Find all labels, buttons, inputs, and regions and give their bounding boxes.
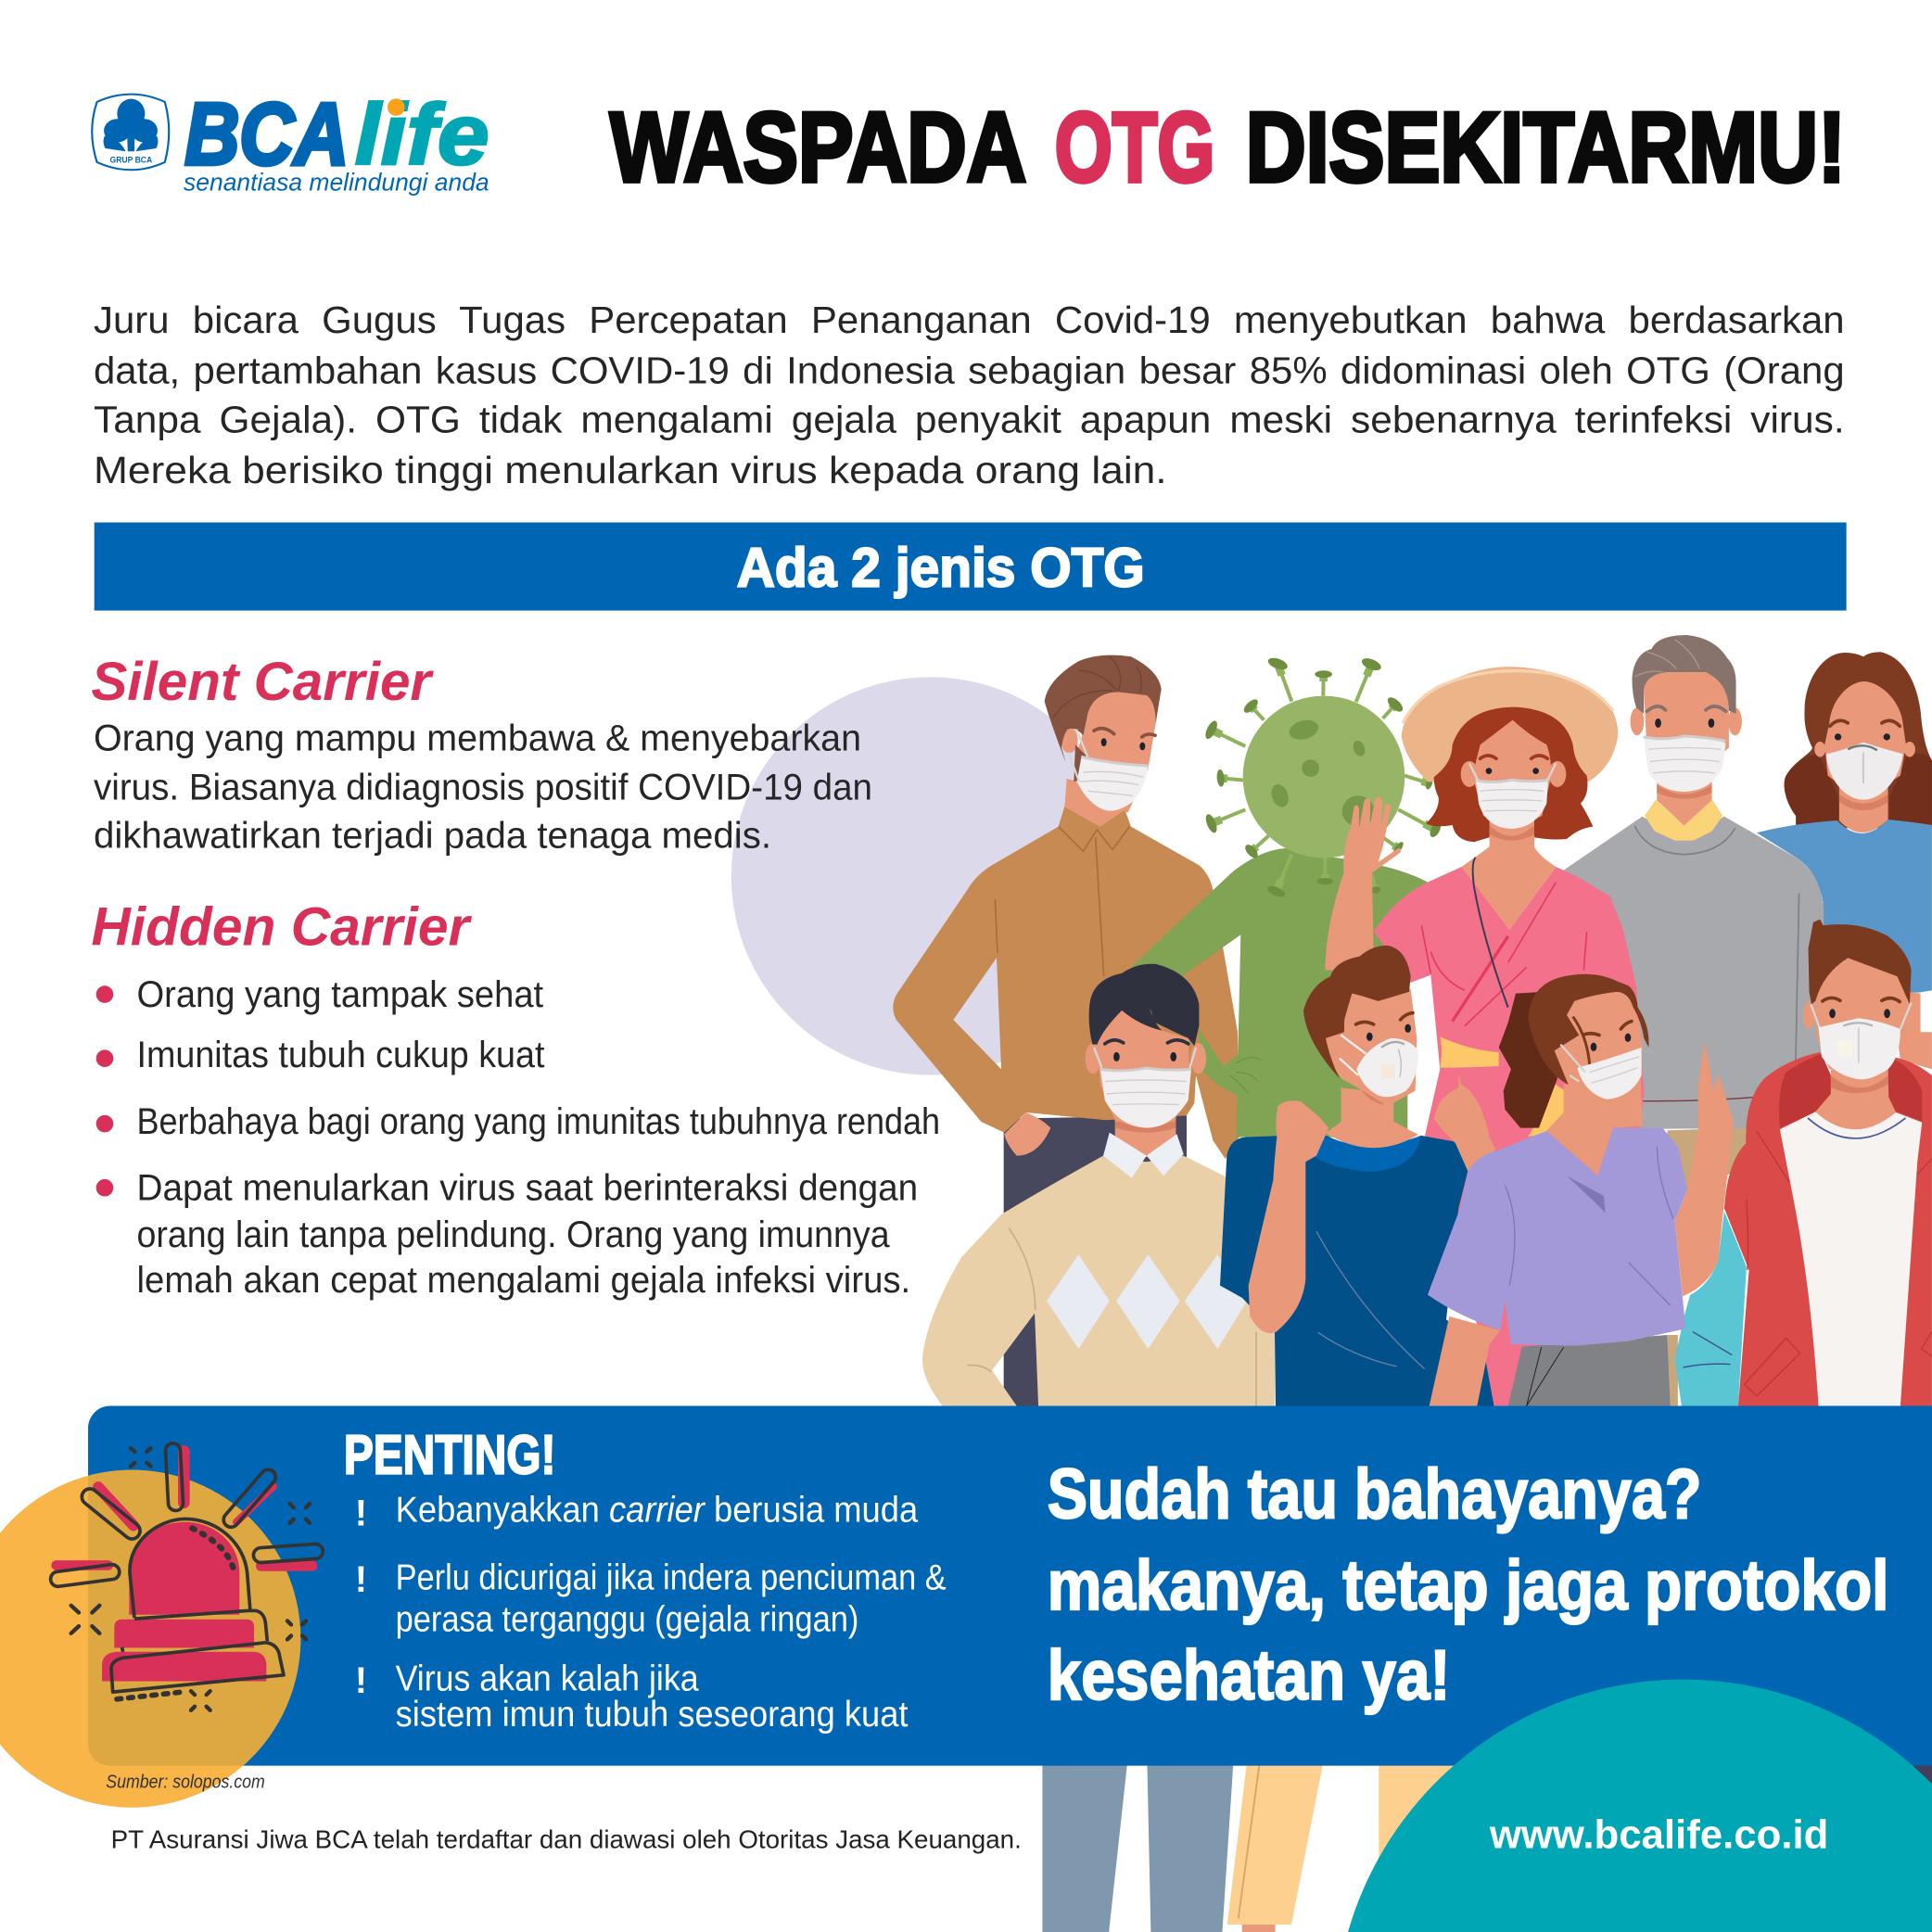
icon: siren alarm [50,1443,324,1710]
person: teen in red jacket with cyan trousers behind [1675,920,1932,1406]
list: important points: Perlu dicurigai jika indera penciuman & [396,1558,947,1598]
callout text [1048,1455,1888,1715]
section banner: Ada 2 jenis OTG [737,537,1145,599]
person: man in grey sweater [1557,635,1824,1406]
list: Hidden Carrier points: orang lain tanpa pelindung. Orang yang imunnya [137,1214,890,1255]
list: Hidden Carrier points: Orang yang tampak sehat [137,974,543,1015]
list: important points: perasa terganggu (gejala ringan) [396,1600,858,1640]
website address: www.bcalife.co.id [1489,1812,1828,1858]
heading: Silent Carrier: Silent Carrier [91,652,434,712]
logo tagline: senantiasa melindungi anda [184,168,489,196]
icon: Grup BCA emblem [92,95,169,170]
person: girl in purple shirt [1428,974,1734,1406]
illustration: crowd wearing masks with virus [893,635,1932,1406]
title: OTG [1055,92,1214,202]
person: woman with sun hat and pink dress [1325,667,1644,1406]
title: WASPADA [610,92,1026,202]
virus character [1131,655,1443,1138]
heading: Hidden Carrier: Hidden Carrier [91,896,473,957]
text: Silent Carrier description [94,718,872,856]
panel: PENTING blue panel with siren circle [0,1405,1932,1808]
person: man in tan shirt [893,655,1239,1406]
logo orange dot [388,98,405,116]
intro paragraph: data, pertambahan kasus COVID-19 di Indonesia sebagian besar 85% didominasi oleh OTG (Orang [94,349,1845,391]
intro paragraph [94,299,1845,491]
intro paragraph: Tanpa Gejala). OTG tidak mengalami gejala penyakit apapun meski sebenarnya terinfeksi virus. [94,399,1845,441]
legs below panel [1042,1762,1932,1932]
title [610,92,1846,202]
list: Hidden Carrier points [96,974,940,1301]
logo: BCA life [92,85,489,196]
decorative lavender circle [731,677,1129,1075]
icon: Grup BCA emblem: GRUP BCA [110,156,152,165]
list: important points: sistem imun tubuh seseorang kuat [396,1695,909,1735]
logo wordmark: BCA: BCA [184,85,349,183]
person: boy in cream sweater [922,964,1275,1406]
list: important points [355,1490,947,1735]
callout text: Sudah tau bahayanya? [1048,1455,1701,1533]
heading: PENTING: PENTING! [344,1424,555,1486]
list: Hidden Carrier points: Berbahaya bagi orang yang imunitas tubuhnya rendah [137,1101,940,1142]
text: Silent Carrier description: virus. Biasanya didiagnosis positif COVID-19 dan [94,768,872,808]
section banner [95,523,1847,611]
disclaimer: PT Asuransi Jiwa BCA telah terdaftar dan diawasi oleh Otoritas Jasa Keuangan. [111,1825,1022,1854]
source note: Sumber: solopos.com [106,1772,265,1792]
intro paragraph: Mereka berisiko tinggi menularkan virus kepada orang lain. [94,449,1167,491]
list: important points: ! [355,1660,367,1701]
person: woman in blue shirt [1757,652,1932,993]
circle overlap with panel [88,1470,300,1765]
list: Hidden Carrier points: lemah akan cepat mengalami gejala infeksi virus. [137,1260,910,1301]
list: important points: Kebanyakkan carrier berusia muda [396,1490,919,1530]
person: boy in navy tee [1220,946,1495,1406]
list: Hidden Carrier points: Dapat menularkan virus saat berinteraksi dengan [137,1168,918,1209]
list: important points: Virus akan kalah jika [396,1659,699,1698]
list: Hidden Carrier points: Imunitas tubuh cukup kuat [137,1035,544,1075]
circle: orange backdrop [0,1470,300,1808]
callout text: kesehatan ya! [1048,1636,1450,1715]
intro paragraph: Juru bicara Gugus Tugas Percepatan Penanganan Covid-19 menyebutkan bahwa berdasarkan [94,299,1845,341]
list: important points: ! [355,1559,367,1600]
text: Silent Carrier description: Orang yang mampu membawa & menyebarkan [94,718,861,758]
text: Silent Carrier description: dikhawatirkan terjadi pada tenaga medis. [94,815,771,856]
list: important points: ! [355,1493,367,1533]
teal website circle [1348,1680,1932,1932]
logo wordmark: life: life [355,86,489,183]
